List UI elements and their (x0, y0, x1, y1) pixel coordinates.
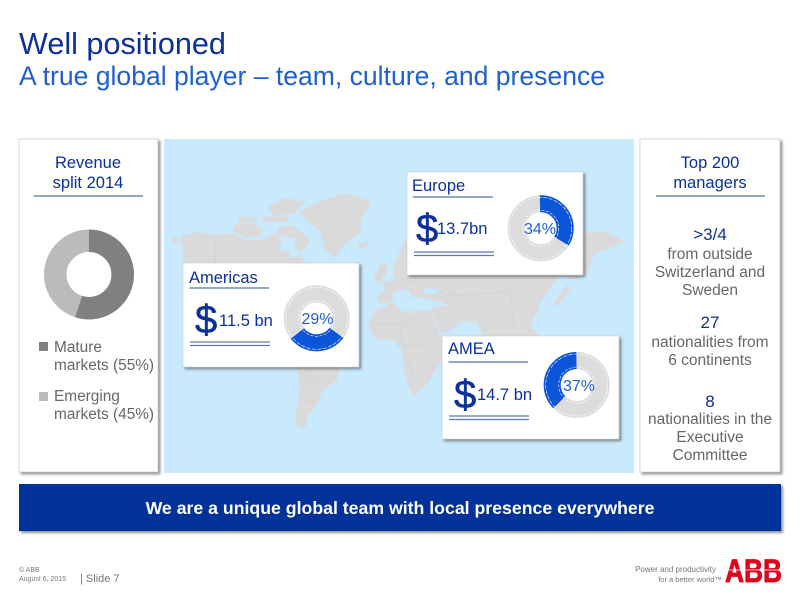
heading: top 200 managers: managers (673, 174, 747, 192)
labrador (291, 256, 308, 265)
card: americas: Americas (189, 269, 258, 287)
legend: mature markets (39, 339, 154, 374)
footer: copyright and slide number: © ABB (19, 566, 40, 574)
card: amea: AMEA (448, 340, 495, 358)
logo: ABB: ABB (725, 553, 782, 589)
banner (19, 484, 781, 531)
title: Well positioned (19, 27, 226, 61)
arabia (432, 305, 462, 333)
stat: executive committee (648, 392, 772, 464)
footer: copyright and slide number: August 6, 2015 (19, 576, 66, 583)
subtitle: A true global player – team, culture, and presence (19, 61, 605, 91)
donut: americas 29% (282, 284, 351, 353)
legend: emerging markets: markets (45%) (54, 406, 154, 423)
legend: mature markets: Mature (54, 339, 102, 356)
black sea (422, 288, 440, 294)
donut: americas 29%: 29% (301, 311, 334, 328)
legend: mature markets: markets (55%) (54, 357, 154, 374)
banner: We are a unique global team with local presence everywhere (146, 498, 655, 518)
eurasia (378, 230, 624, 337)
stat: nationalities: nationalities from (651, 334, 769, 351)
stat: nationalities: 6 continents (668, 352, 752, 369)
footer: copyright and slide number: | Slide 7 (80, 573, 120, 585)
card: amea: 14.7 bn (477, 386, 532, 404)
south america (295, 366, 340, 428)
stat: nationalities: 27 (701, 313, 719, 332)
stat: share from outside: >3/4 (693, 225, 727, 244)
card: europe: Europe (412, 177, 465, 195)
stat: executive committee: Executive (676, 429, 744, 446)
donut: amea 37% (542, 350, 611, 420)
legend: emerging markets (39, 388, 154, 423)
footer: tagline: for a better world™ (658, 575, 722, 584)
stat: executive committee: nationalities in the (648, 411, 772, 428)
card: americas: $ (195, 298, 217, 342)
stat: executive committee: 8 (705, 392, 715, 411)
card: europe (407, 172, 583, 275)
stat: share from outside: from outside (667, 246, 753, 263)
greenland (298, 193, 372, 258)
card: europe: $ (416, 207, 438, 251)
africa (368, 303, 444, 397)
donut: europe 34% (510, 197, 572, 259)
north america (180, 232, 292, 263)
legend: emerging markets: Emerging (54, 388, 120, 405)
card: americas (183, 263, 359, 367)
card: amea: $ (454, 373, 476, 417)
kuril islands (602, 272, 628, 277)
japan (550, 285, 570, 308)
footer: tagline: Power and productivity (635, 565, 716, 574)
stat: share from outside: Sweden (682, 282, 738, 299)
uk and scandinavia (375, 262, 388, 276)
heading: top 200 managers: Top 200 (681, 154, 739, 172)
title (19, 27, 605, 91)
stat: executive committee: Committee (673, 447, 747, 464)
panel: world map (164, 139, 634, 473)
heading: revenue split (34, 154, 143, 196)
footer: tagline (635, 565, 722, 584)
baffin and quebec (278, 225, 311, 252)
card: americas: 11.5 bn (219, 312, 273, 330)
stat: share from outside (655, 225, 765, 299)
panel: top 200 managers (640, 139, 780, 472)
donut: europe 34%: 34% (524, 221, 556, 238)
stat: nationalities (651, 313, 769, 369)
card: europe: 13.7bn (437, 220, 487, 238)
card: amea (442, 336, 619, 439)
alaska islands (170, 237, 178, 245)
country borders (215, 235, 515, 402)
footer: copyright and slide number (19, 566, 120, 585)
arctic islands (233, 222, 262, 237)
heading: revenue split: split 2014 (53, 174, 123, 192)
heading: revenue split: Revenue (55, 154, 121, 172)
donut chart: revenue split (55, 241, 123, 308)
donut: amea 37%: 37% (563, 378, 595, 395)
stat: share from outside: Switzerland and (655, 264, 765, 281)
panel: revenue split (19, 139, 158, 472)
heading: top 200 managers (656, 154, 765, 196)
iceland (358, 242, 370, 248)
